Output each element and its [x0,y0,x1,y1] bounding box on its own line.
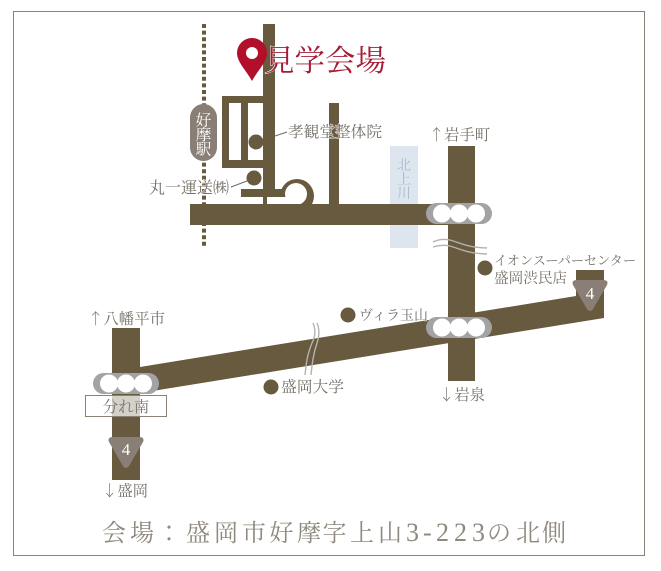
river: Kitakami [390,146,418,248]
venue title: 見学会場 [264,45,386,78]
road break marks: right road [433,239,487,254]
station badge: Koma: 摩 [196,126,211,144]
traffic signal: main junction [426,203,492,224]
landmark: Koukando clinic [248,122,382,150]
intersection label: Wakare-minami [86,396,166,416]
venue address: 3-223 [406,518,485,547]
railway dotted line [202,24,206,248]
venue pin icon [237,38,267,81]
intersection label: Wakare-minami: 分れ南 [103,398,149,416]
local roads near venue [222,24,339,213]
direction label: Iwate-machi: ↑岩手町 [429,123,490,145]
landmark: Aeon Super Center [478,253,636,287]
landmark: Maruichi Unso [149,170,262,197]
venue address: 会場：盛岡市好摩字上山 [102,513,402,548]
road: diagonal route [140,270,604,393]
road break marks: diagonal road [305,323,319,375]
river: Kitakami: 北 [397,158,411,174]
traffic signal: Wakare-minami [93,373,159,394]
route 4 shield: left: 4 [122,440,131,459]
station badge: Koma [190,104,217,161]
river: Kitakami: 川 [397,186,411,202]
station badge: Koma: 駅 [195,140,212,158]
traffic signal: diagonal junction [426,317,492,338]
landmark: Koukando clinic: 孝観堂整体院 [288,122,382,141]
route 4 shield: right [572,280,608,311]
landmark: Villa Tamayama: ヴィラ玉山 [359,308,428,324]
landmark: Aeon Super Center: 盛岡渋民店 [494,270,567,287]
river: Kitakami: 上 [397,172,411,188]
landmark: Morioka University: 盛岡大学 [281,378,344,396]
station badge: Koma: 好 [196,112,212,130]
direction label: Hachimantai: ↑八幡平市 [88,307,165,329]
direction label: Morioka: ↓盛岡 [102,479,148,501]
road: Iwate-machi to Iwaizumi [448,146,475,381]
venue address: の北側 [487,513,566,548]
road: left north-south [112,328,140,480]
landmark: Maruichi Unso: 丸一運送㈱ [149,179,229,197]
main road east-west [190,204,448,225]
route 4 shield: left [108,437,144,468]
direction label: Iwaizumi: ↓岩泉 [439,383,485,405]
route 4 shield: right: 4 [586,284,595,303]
landmark: Aeon Super Center: イオンスーパーセンター [494,253,636,268]
